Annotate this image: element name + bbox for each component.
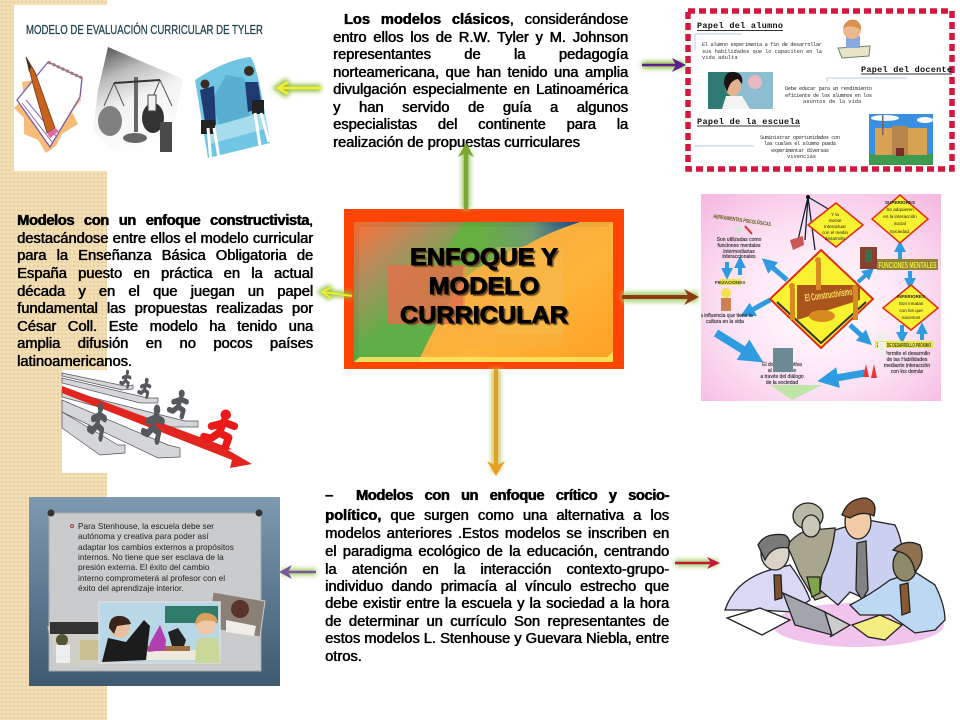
image: constructivism mind map: de la sociedad xyxy=(766,380,798,386)
text: César Coll. Este modelo ha tenido una xyxy=(17,319,313,335)
image: roles of student, teacher and school: eficiente de los alumnos en los xyxy=(785,93,872,99)
image: Stenhouse slide: internos. No tiene que ser esclava de la xyxy=(78,552,224,562)
image: roles of student, teacher and school: experimentar diversas xyxy=(771,148,829,154)
text: critical and socio-political models xyxy=(325,488,670,665)
image: roles of student, teacher and school: vida adulta xyxy=(702,55,738,61)
image: constructivism mind map: INFERIORES xyxy=(897,294,925,299)
title: MODELO xyxy=(429,273,539,300)
text: otros. xyxy=(325,649,362,665)
text: España puesto en práctica en la actual xyxy=(17,266,313,282)
arrow: towards constructivism map xyxy=(622,289,699,305)
image: constructivism mind map: ZONA DE DESARROLLO PRÓXIMO xyxy=(877,341,931,349)
arrow: up to classic models text xyxy=(458,143,474,209)
image: constructivism mind map: Son utilizadas como xyxy=(717,237,762,243)
image: constructivism mind map: cultura en la vida xyxy=(706,319,744,325)
image: roles of student, teacher and school xyxy=(685,8,955,172)
text: realización de propuestas curriculares xyxy=(333,135,580,151)
image: roles of student, teacher and school: Papel del docente xyxy=(861,65,952,75)
text: de determinar un currículo Son representantes de xyxy=(325,614,669,630)
image: constructivism mind map: Se adquieren xyxy=(886,207,914,212)
image: Tyler curriculum evaluation model xyxy=(14,5,270,171)
image: constructivism mind map: funciones mentales xyxy=(717,243,761,249)
image: constructivism mind map: El docente motiva xyxy=(762,362,802,368)
text: individuo dando primacía al vínculo estrecho que xyxy=(325,579,669,595)
text: divulgación especialmente en Latinoamérica xyxy=(333,82,628,98)
image: Stenhouse slide: éxito del aprendizaje interior. xyxy=(78,583,184,593)
image: roles of student, teacher and school: Papel del alumno xyxy=(697,21,783,31)
image: Stenhouse slide: autónoma y creativa para poder así xyxy=(78,531,209,541)
arrow: towards constructivist text xyxy=(322,287,352,298)
image: constructivism mind map: Permite el desarrollo xyxy=(884,351,930,357)
image: constructivism mind map: mente xyxy=(829,218,842,223)
image: constructivism mind map: Y la xyxy=(831,212,839,217)
image: roles of student, teacher and school: vivencias xyxy=(787,154,816,160)
text: para la Enseñanza Básica Obligatoria de xyxy=(17,248,313,264)
image: constructivism mind map xyxy=(701,194,941,401)
central box xyxy=(344,209,624,369)
text: político, que surgen como una alternativa a los xyxy=(325,508,669,524)
central gradient panel xyxy=(354,222,613,362)
image: roles of student, teacher and school: El alumno experimenta a fin de desarrollar xyxy=(702,42,822,48)
image: constructivism mind map: desarrollo xyxy=(825,236,846,241)
image: roles of student, teacher and school: Suministrar oportunidades con xyxy=(760,135,840,141)
title: ENFOQUE Y xyxy=(410,244,558,271)
image: constructivism mind map: Sociedad. xyxy=(890,229,910,234)
image: constructivism mind map: social xyxy=(894,221,906,226)
image: Stenhouse slide: adaptar los cambios externos a propósitos xyxy=(78,542,234,552)
title xyxy=(400,244,570,329)
text: amplia difusión en no pocos países xyxy=(17,336,313,352)
image: constructivism mind map: Interactuar xyxy=(824,224,846,229)
image: constructivism mind map: con el medio xyxy=(822,230,848,235)
image: constructivism mind map: a través del diálogo xyxy=(760,374,804,380)
text: la atención en la interacción contexto-grupo- xyxy=(325,562,669,578)
arrow: towards roles image xyxy=(642,58,686,72)
arrow: towards team image xyxy=(675,557,720,569)
image: team meeting around laptop xyxy=(724,497,946,647)
image: constructivism mind map: con los que xyxy=(899,308,923,313)
image: roles of student, teacher and school: Debe educar para un rendimiento xyxy=(785,86,872,92)
text: Los modelos clásicos, considerándose xyxy=(344,12,628,28)
image: roles of student, teacher and school: las cuales el alumno pueda xyxy=(764,141,837,147)
image: Stenhouse slide: presión externa. El éxito del cambio xyxy=(78,562,210,572)
text: norteamericana, que han tenido una amplia xyxy=(333,65,628,81)
text: fundamental las propuestas realizadas por xyxy=(17,301,313,317)
image: constructivism mind map: nacemos xyxy=(902,315,921,320)
image: Stenhouse slide: Para Stenhouse, la escuela debe ser xyxy=(78,521,214,531)
text: década y en el que juegan un papel xyxy=(17,284,313,300)
image: constructivism mind map: intermediarias xyxy=(723,249,755,255)
image: constructivism mind map: HERRAMIENTAS PSICOLÓGICAS xyxy=(713,212,772,228)
text: constructivist models xyxy=(17,213,314,370)
text: destacándose entre ellos el modelo curricular xyxy=(17,231,313,247)
image: constructivism mind map: Son innatas xyxy=(899,301,924,306)
text: y han servido de guía a algunos xyxy=(333,100,628,116)
image: constructivism mind map: con los demás xyxy=(891,369,924,375)
image: constructivism mind map: de las Habilidades xyxy=(887,357,928,363)
arrow: down to critical models text xyxy=(487,369,505,476)
image: roles of student, teacher and school: asuntos de la vida xyxy=(803,99,862,105)
image: Stenhouse slide xyxy=(29,497,280,686)
text: classic models xyxy=(332,12,629,151)
text: latinoamericanos. xyxy=(17,354,132,370)
image: Stenhouse slide: interno comprometerá al profesor con el xyxy=(78,573,225,583)
arrow: towards Stenhouse slide xyxy=(279,565,316,579)
image: constructivism mind map: PIEZACIONES xyxy=(715,280,745,285)
image: constructivism mind map: al estudiante xyxy=(768,368,796,374)
image: constructivism mind map: La influencia que tiene la xyxy=(697,313,753,319)
text: estos modelos L. Stenhouse y Guevara Niebla, entre xyxy=(325,631,669,647)
image: constructivism mind map: en la interacción xyxy=(883,214,917,219)
text: debe existir entre la escuela y la sociedad a la hora xyxy=(325,596,669,612)
image: roles of student, teacher and school: Papel de la escuela xyxy=(697,117,800,127)
text: – Modelos con un enfoque crítico y socio- xyxy=(325,488,669,504)
image: roles of student, teacher and school: sus habilidades que lo capaciten en la xyxy=(702,49,823,55)
image: Tyler curriculum evaluation model: MODELO DE EVALUACIÓN CURRICULAR DE TYLER xyxy=(26,22,263,37)
text: especialistas del continente para la xyxy=(333,117,628,133)
text: representantes de la pedagogía xyxy=(333,47,628,63)
image: constructivism mind map: mediante interacción xyxy=(884,363,930,369)
title: CURRICULAR xyxy=(400,302,568,329)
text: Modelos con un enfoque constructivista, xyxy=(17,213,313,229)
arrow: towards Tyler model xyxy=(278,81,321,95)
image: runners on arrows xyxy=(62,370,252,473)
text: entro ellos los de R.W. Tyler y M. Johnson xyxy=(333,30,628,46)
image: constructivism mind map: El Constructivismo xyxy=(804,287,853,304)
image: constructivism mind map: interaccionales xyxy=(722,254,756,260)
image: constructivism mind map: SUPERIORES xyxy=(885,200,915,205)
text: el paradigma ecológico de la educación, centrando xyxy=(325,544,669,560)
text: modelos anteriores .Estos modelos se inscriben en xyxy=(325,526,669,542)
